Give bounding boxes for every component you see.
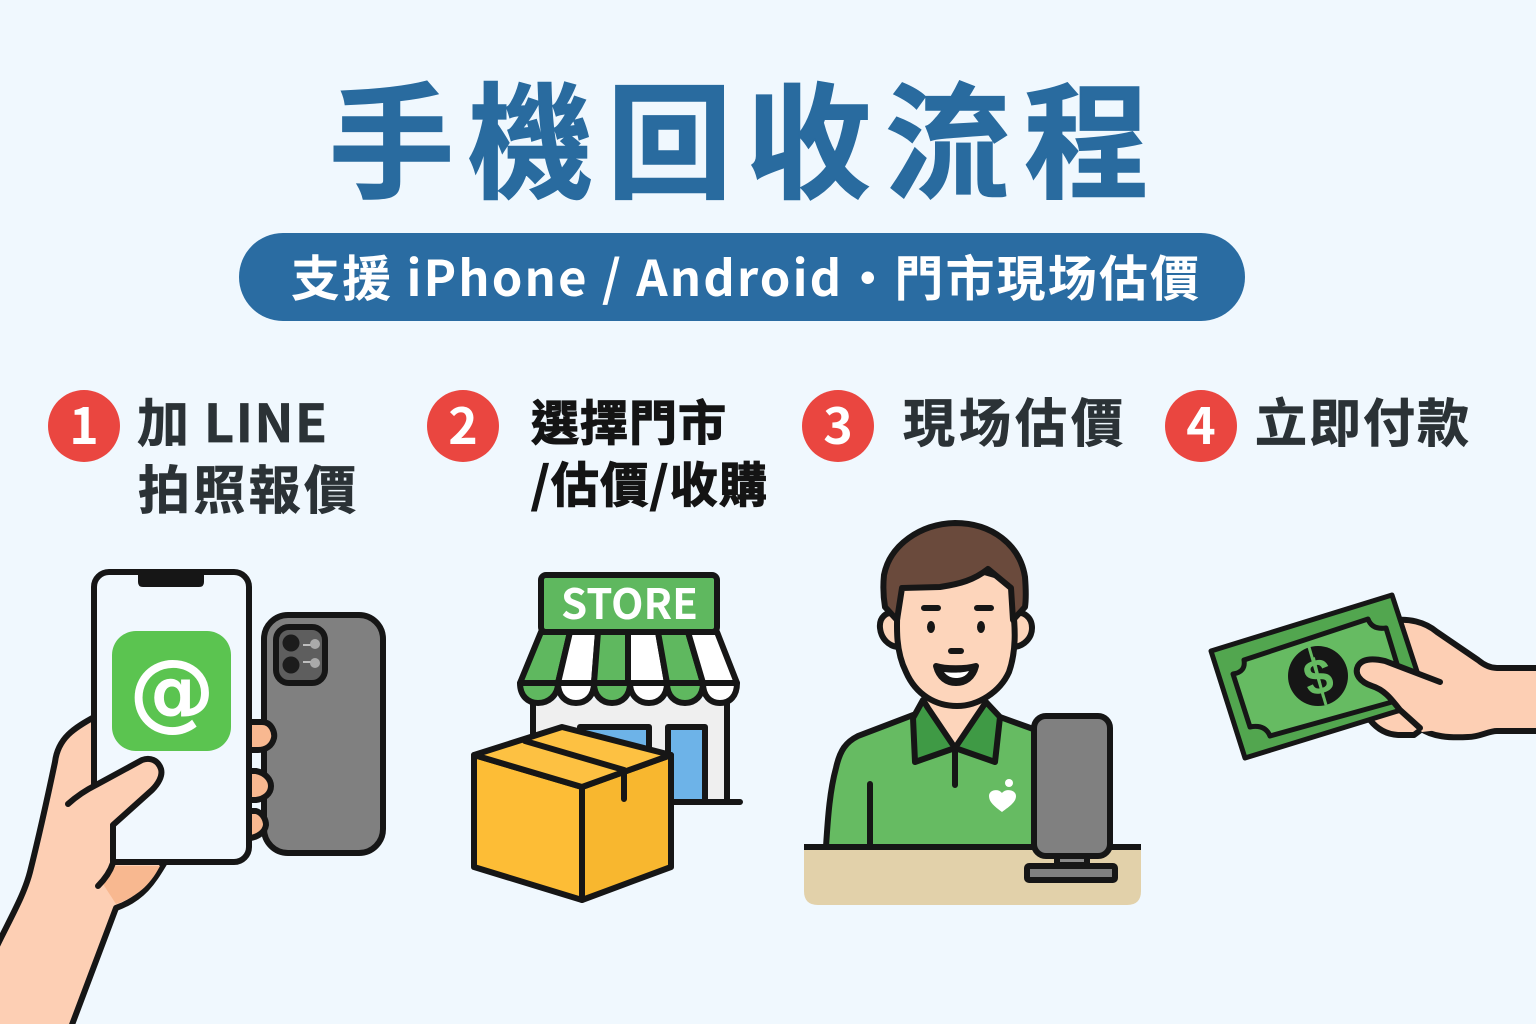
- title: 手機回收流程: [329, 43, 1149, 224]
- icon: cardboard box: [474, 727, 671, 900]
- icon: brows and eyes: [924, 608, 991, 633]
- icon: shirt seams: [870, 748, 955, 846]
- icon: building: [533, 700, 727, 802]
- illustration: hand giving banknote: [1211, 595, 1536, 758]
- icon: window and door: [580, 727, 705, 802]
- icon: collar: [913, 700, 1000, 762]
- icon: awning: [520, 632, 737, 703]
- icon: LINE app tile: [112, 631, 231, 751]
- icon: LINE app tile: @: [129, 641, 215, 741]
- icon: back phone: [264, 615, 383, 853]
- illustration: clerk behind counter: [804, 523, 1141, 905]
- step 2 label: 選擇門市: [531, 384, 726, 454]
- step 4 badge: [1165, 387, 1237, 462]
- icon: smile: [936, 666, 976, 683]
- icon: store sign: STORE: [561, 571, 698, 632]
- illustration: hand holding phones: [0, 572, 383, 1024]
- icon: hair: [883, 523, 1026, 620]
- step 3 label: 現场估價: [903, 382, 1123, 457]
- icon: notch: [138, 572, 204, 587]
- icon: dollar coin: [1288, 646, 1348, 708]
- icon: front phone: [94, 572, 249, 862]
- icon: heart logo: [989, 779, 1016, 812]
- icon: neck: [926, 695, 985, 748]
- step 2 label: [531, 384, 767, 516]
- step 3 badge: 3: [823, 387, 853, 459]
- step 1 label: [137, 382, 356, 524]
- step 4 label: 立即付款: [1255, 382, 1469, 457]
- step 1 label: 加 LINE: [137, 382, 327, 457]
- icon: face: [897, 565, 1015, 706]
- icon: thumb: [58, 759, 161, 886]
- step 1 label: 拍照報價: [138, 449, 356, 524]
- icon: hand body: [1390, 620, 1536, 737]
- icon: fingers: [245, 722, 274, 838]
- icon: banknote: [1211, 595, 1427, 758]
- icon: thumb: [1357, 659, 1480, 732]
- icon: ears: [880, 613, 1032, 647]
- icon: nose: [951, 648, 961, 654]
- step 2 badge: 2: [448, 387, 478, 459]
- step 4 badge: 4: [1186, 387, 1216, 459]
- step 2 label: /估價/收購: [531, 446, 767, 516]
- icon: desk: [804, 847, 1141, 905]
- icon: polo shirt: [826, 700, 1036, 847]
- step 2 badge: [427, 387, 499, 462]
- icon: palm shadow: [103, 866, 160, 904]
- icon: desk edge: [804, 844, 1141, 850]
- icon: tablet stand: [1027, 855, 1115, 880]
- step 1 badge: 1: [69, 387, 99, 459]
- icon: hand palm: [0, 716, 165, 1024]
- step 3 badge: [802, 387, 874, 462]
- illustration: store and parcel: [474, 571, 740, 900]
- step 1 badge: [48, 387, 120, 462]
- subtitle pill: 支援 iPhone / Android・門市現场估價: [291, 240, 1199, 311]
- icon: lower fingers: [1370, 700, 1426, 735]
- icon: tablet screen: [1034, 716, 1110, 856]
- icon: dollar coin: $: [1298, 646, 1339, 708]
